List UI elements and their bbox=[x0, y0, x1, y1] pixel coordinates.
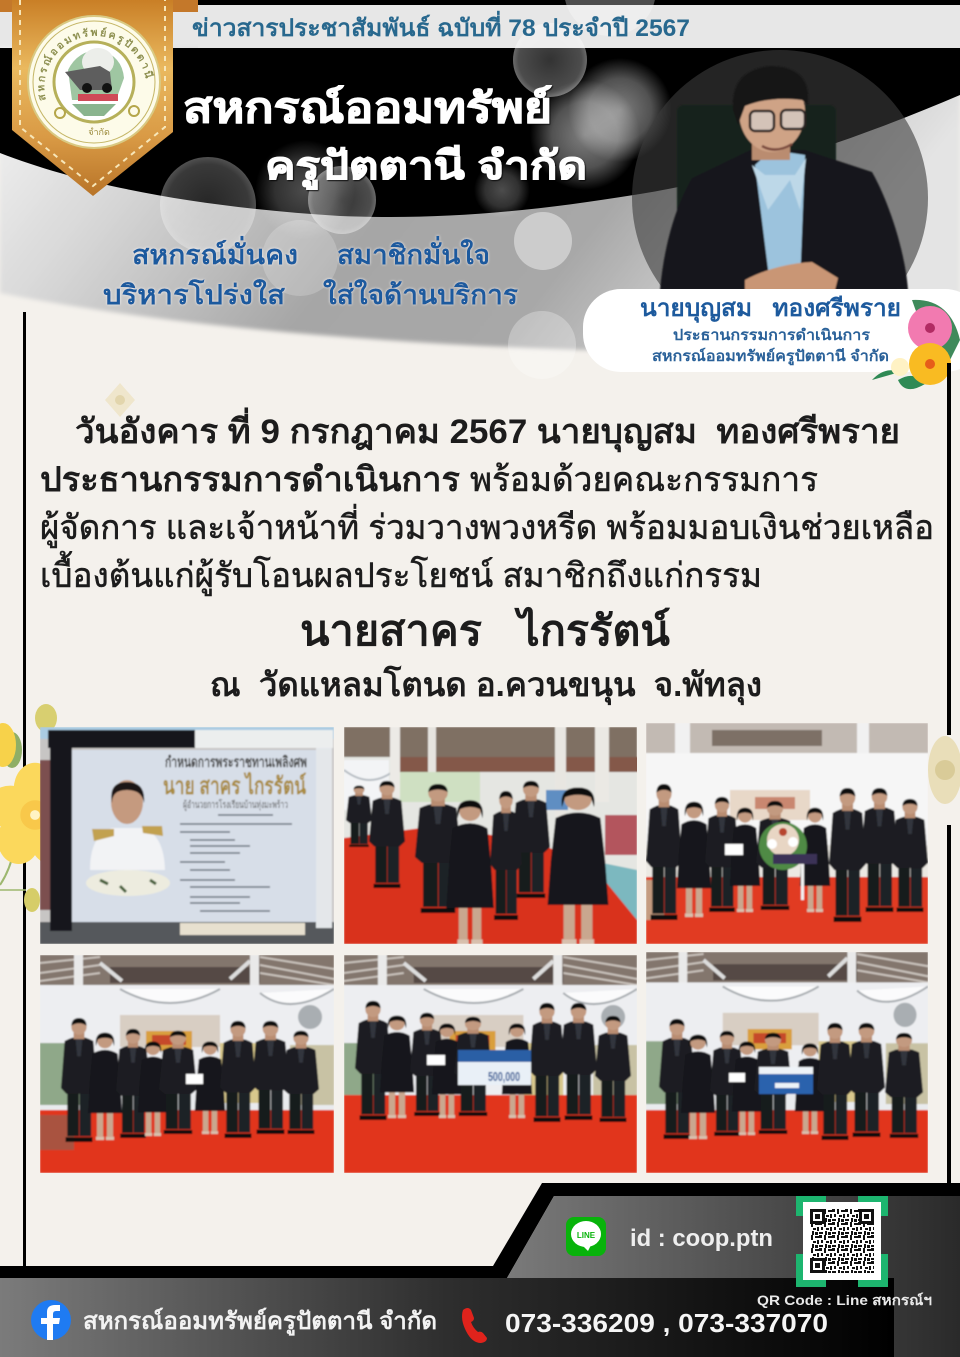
photo 1: funeral poster bbox=[40, 727, 334, 944]
photo 4: group with envelope bbox=[40, 955, 334, 1173]
slogan bbox=[103, 235, 519, 310]
photo 1: funeral poster: ผู้อำนวยการโรงเรียนบ้านทุ่งมะพร้าว bbox=[183, 798, 288, 811]
qr code bbox=[796, 1196, 888, 1287]
icon: facebook bbox=[31, 1300, 71, 1340]
announcement text: ผู้จัดการ และเจ้าหน้าที่ ร่วมวางพวงหรีด พร้อมมอบเงินช่วยเหลือ bbox=[40, 504, 934, 548]
photo 5: group with donation board bbox=[344, 955, 637, 1173]
slogan: บริหารโปร่งใส bbox=[103, 278, 286, 310]
ornament: right side bbox=[928, 736, 960, 804]
name plate: ประธานกรรมการดำเนินการ bbox=[673, 326, 871, 344]
photo 3: group with wreath bbox=[646, 723, 928, 944]
vertical side rules bbox=[23, 312, 951, 1266]
slogan: สมาชิกมั่นใจ bbox=[337, 235, 490, 270]
logo: cooperative seal: จำกัด bbox=[88, 127, 110, 137]
ribbon badge bbox=[0, 0, 198, 196]
tropical flowers bbox=[872, 300, 960, 389]
top newsletter title: ข่าวสารประชาสัมพันธ์ ฉบับที่ 78 ประจำปี 2567 bbox=[192, 10, 690, 42]
logo: cooperative seal bbox=[27, 15, 161, 149]
blue board bbox=[759, 1067, 813, 1094]
announcement text: พร้อมด้วยคณะกรรมการ bbox=[470, 461, 818, 499]
phone numbers: 073-336209 , 073-337070 bbox=[505, 1308, 828, 1338]
announcement text: ประธานกรรมการดำเนินการ bbox=[40, 461, 461, 499]
announcement text: เบื้องต้นแก่ผู้รับโอนผลประโยชน์ สมาชิกถึงแก่กรรม bbox=[40, 551, 762, 596]
icon: line: LINE bbox=[577, 1231, 596, 1240]
portrait circle bbox=[632, 50, 928, 346]
facebook page name: สหกรณ์ออมทรัพย์ครูปัตตานี จำกัด bbox=[83, 1307, 437, 1336]
donation board: 500,000 bbox=[488, 1069, 520, 1084]
yellow flowers left bbox=[0, 704, 84, 912]
header swoosh bbox=[0, 0, 960, 354]
qr caption: QR Code : Line สหกรณ์ฯ bbox=[757, 1292, 932, 1308]
organisation title: ครูปัตตานี จำกัด bbox=[265, 145, 587, 190]
donation board bbox=[458, 1050, 531, 1085]
organisation title: สหกรณ์ออมทรัพย์ bbox=[183, 85, 552, 131]
icon: phone bbox=[462, 1308, 487, 1343]
logo: cooperative seal: สหกรณ์ออมทรัพย์ครูปัตตานี bbox=[38, 27, 154, 101]
ornament: upper left bbox=[105, 383, 135, 417]
slogan: ใส่ใจด้านบริการ bbox=[323, 279, 519, 310]
photo 2: guests greeting on red carpet bbox=[344, 727, 637, 944]
icon: line bbox=[566, 1217, 606, 1256]
portrait: chairman bbox=[660, 66, 908, 290]
organisation title bbox=[183, 85, 587, 190]
photo 6: group with blue board bbox=[646, 952, 928, 1173]
name plate: นายบุญสม ทองศรีพราย bbox=[640, 295, 901, 324]
slogan: สหกรณ์มั่นคง bbox=[132, 235, 298, 270]
bokeh circles bbox=[160, 0, 672, 379]
name plate: สหกรณ์ออมทรัพย์ครูปัตตานี จำกัด bbox=[652, 347, 889, 366]
footer bbox=[0, 1183, 960, 1357]
name plate bbox=[583, 289, 960, 389]
line id: id : coop.ptn bbox=[630, 1225, 773, 1252]
announcement text: นายสาคร ไกรรัตน์ bbox=[300, 606, 670, 654]
announcement text: ณ วัดแหลมโตนด อ.ควนขนุน จ.พัทลุง bbox=[210, 665, 762, 706]
announcement text: วันอังคาร ที่ 9 กรกฎาคม 2567 นายบุญสม ทองศรีพราย bbox=[75, 407, 900, 453]
announcement text bbox=[40, 407, 934, 706]
